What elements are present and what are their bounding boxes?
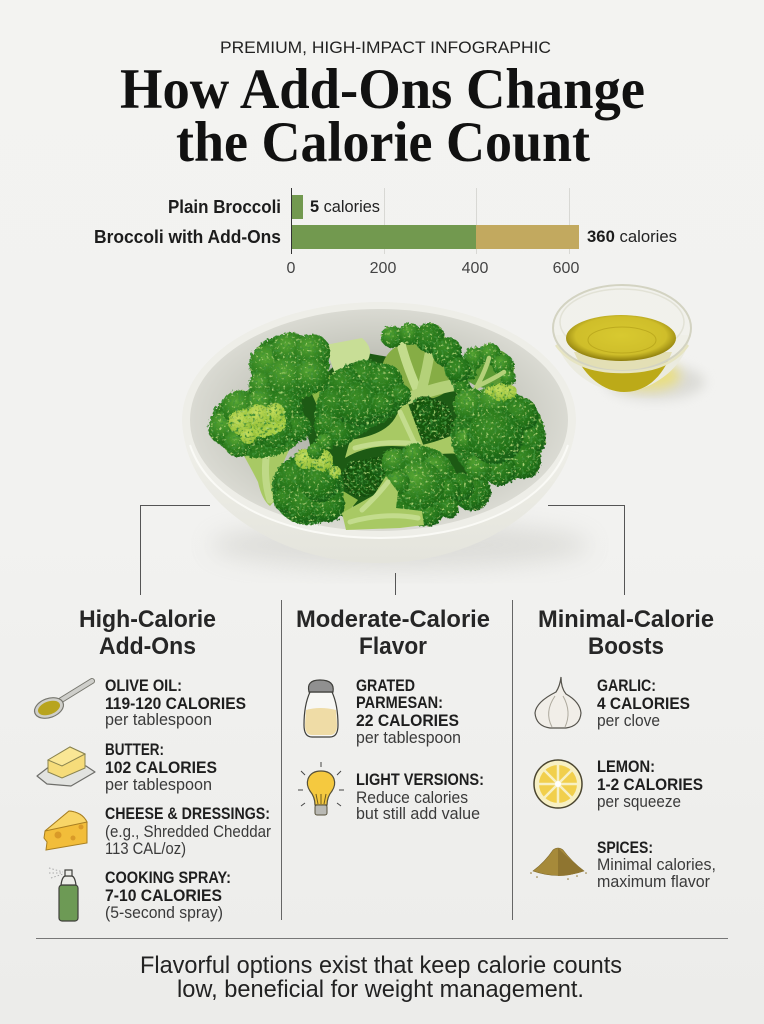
text: olive oil: 119-120 CALORIES xyxy=(105,695,246,713)
value: 5 calories: 5 calories xyxy=(310,198,380,216)
axis labels: 400 xyxy=(462,260,488,277)
footer statement xyxy=(140,952,622,1003)
heading: minimal-calorie boosts: Minimal-Calorie xyxy=(538,606,714,633)
text: spices: SPICES: xyxy=(597,839,653,857)
heading: high-calorie add-ons xyxy=(79,606,216,660)
icon: cooking spray xyxy=(49,868,78,921)
text: butter: BUTTER: xyxy=(105,741,164,759)
text: grated parmesan: per tablespoon xyxy=(356,729,461,747)
shaded mass behind florets xyxy=(300,350,500,520)
bar chart: calories xyxy=(94,188,677,277)
floret: right xyxy=(422,383,546,486)
axis labels: 0 xyxy=(287,260,296,277)
text: spices: maximum flavor xyxy=(597,873,710,891)
floret: centre xyxy=(314,360,424,458)
connector: right xyxy=(548,506,624,595)
heading: high-calorie add-ons: High-Calorie xyxy=(79,606,216,633)
bar: add-ons green segment xyxy=(292,225,476,249)
heading: high-calorie add-ons: Add-Ons xyxy=(99,633,196,660)
text: olive oil xyxy=(105,677,246,729)
text: cooking spray xyxy=(105,869,231,922)
heading: minimal-calorie boosts xyxy=(538,606,714,660)
panel: minimal-calorie boosts xyxy=(530,606,716,891)
dark interior greens xyxy=(411,396,491,511)
icon: light bulb xyxy=(298,762,344,815)
white bowl xyxy=(182,302,576,563)
label: plain broccoli: Plain Broccoli xyxy=(168,197,281,217)
heading: moderate-calorie flavor: Flavor xyxy=(359,633,427,660)
panel: high-calorie add-ons xyxy=(32,606,271,922)
text: lemon: 1-2 CALORIES xyxy=(597,776,703,794)
text: light versions: but still add value xyxy=(356,805,480,823)
floret: top centre xyxy=(381,323,471,402)
connector: centre xyxy=(394,573,396,595)
axis labels: 200 xyxy=(370,260,396,277)
text: garlic: GARLIC: xyxy=(597,677,656,695)
text: cheese and dressings: (e.g., Shredded Cheddar xyxy=(105,823,271,841)
icon: parmesan shaker xyxy=(304,680,338,737)
title: the Calorie Count xyxy=(176,111,590,174)
heading: minimal-calorie boosts: Boosts xyxy=(588,633,664,660)
icon: cheese wedge xyxy=(44,811,87,850)
connector: left xyxy=(140,506,210,595)
text: garlic: 4 CALORIES xyxy=(597,695,690,713)
title: How Add-Ons Change xyxy=(120,58,645,121)
axis labels xyxy=(287,260,579,277)
text: garlic: per clove xyxy=(597,712,660,730)
text: cooking spray: 7-10 CALORIES xyxy=(105,887,222,905)
text: olive oil: OLIVE OIL: xyxy=(105,677,182,695)
icon: spice pile xyxy=(530,848,587,880)
heading: moderate-calorie flavor xyxy=(296,606,490,660)
dark lower interior xyxy=(343,457,389,497)
text: spices xyxy=(597,839,716,891)
text: garlic xyxy=(597,677,690,730)
icon: butter on dish xyxy=(37,747,95,786)
bowl shadow xyxy=(210,521,590,569)
floret: top right small xyxy=(462,343,516,388)
floret: bottom left xyxy=(272,443,358,525)
footer statement: low, beneficial for weight management. xyxy=(177,976,584,1003)
text: light versions: LIGHT VERSIONS: xyxy=(356,771,484,789)
text: light versions xyxy=(356,771,484,823)
title xyxy=(120,58,645,174)
floret: bottom centre xyxy=(342,443,460,530)
text: grated parmesan: PARMESAN: xyxy=(356,694,443,712)
icon: spoon of olive oil xyxy=(32,681,92,722)
text: cheese and dressings: 113 CAL/oz) xyxy=(105,840,186,858)
text: lemon: per squeeze xyxy=(597,793,681,811)
panel: moderate-calorie flavor xyxy=(296,606,490,823)
text: cooking spray: COOKING SPRAY: xyxy=(105,869,231,887)
icon: garlic xyxy=(535,677,581,728)
text: cheese and dressings: CHEESE & DRESSINGS: xyxy=(105,805,270,823)
text: grated parmesan: GRATED xyxy=(356,677,415,695)
broccoli xyxy=(208,323,546,530)
text: grated parmesan xyxy=(356,677,461,747)
text: butter: per tablespoon xyxy=(105,776,212,794)
footer statement: Flavorful options exist that keep calorie counts xyxy=(140,952,622,979)
bar: add-ons gold segment xyxy=(476,225,579,249)
floret: left xyxy=(208,388,312,506)
text: butter xyxy=(105,741,217,794)
text: butter: 102 CALORIES xyxy=(105,759,217,777)
subtitle: PREMIUM, HIGH-IMPACT INFOGRAPHIC xyxy=(220,38,551,57)
axis labels: 600 xyxy=(553,260,579,277)
heading: moderate-calorie flavor: Moderate-Calorie xyxy=(296,606,490,633)
text: spices: Minimal calories, xyxy=(597,856,716,874)
text: cooking spray: (5-second spray) xyxy=(105,904,223,922)
text: light versions: Reduce calories xyxy=(356,789,468,807)
text: cheese and dressings xyxy=(105,805,271,858)
label: broccoli with add-ons: Broccoli with Add-Ons xyxy=(94,227,281,247)
text: olive oil: per tablespoon xyxy=(105,711,212,729)
icon: lemon slice xyxy=(534,760,582,808)
text: lemon: LEMON: xyxy=(597,758,655,776)
value: 360 calories: 360 calories xyxy=(587,228,677,246)
bowl of oil xyxy=(553,285,705,400)
floret: top left xyxy=(249,332,370,408)
bar: plain broccoli xyxy=(292,195,303,219)
text: grated parmesan: 22 CALORIES xyxy=(356,712,459,730)
text: lemon xyxy=(597,758,703,811)
